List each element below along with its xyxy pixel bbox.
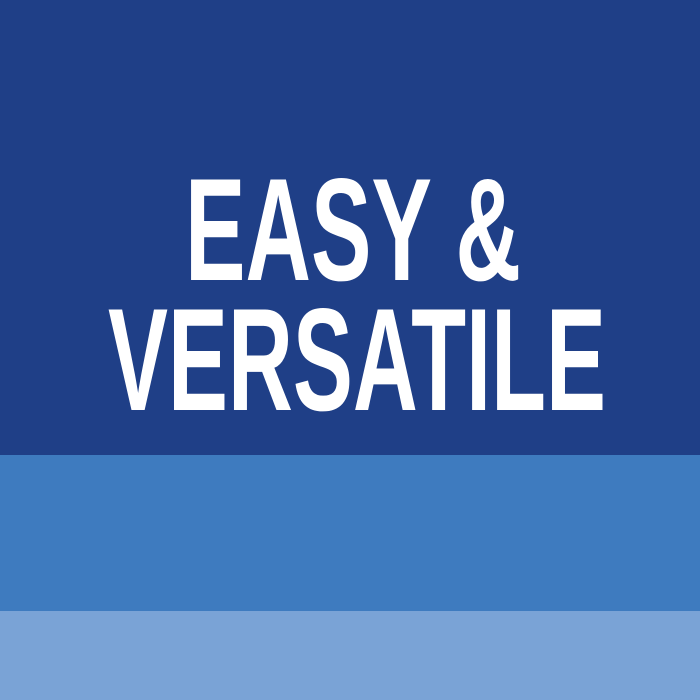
panel: dark blue top band	[0, 0, 700, 455]
title	[108, 148, 606, 441]
panel: mid blue band	[0, 455, 700, 611]
panel: light blue bottom band	[0, 611, 700, 700]
